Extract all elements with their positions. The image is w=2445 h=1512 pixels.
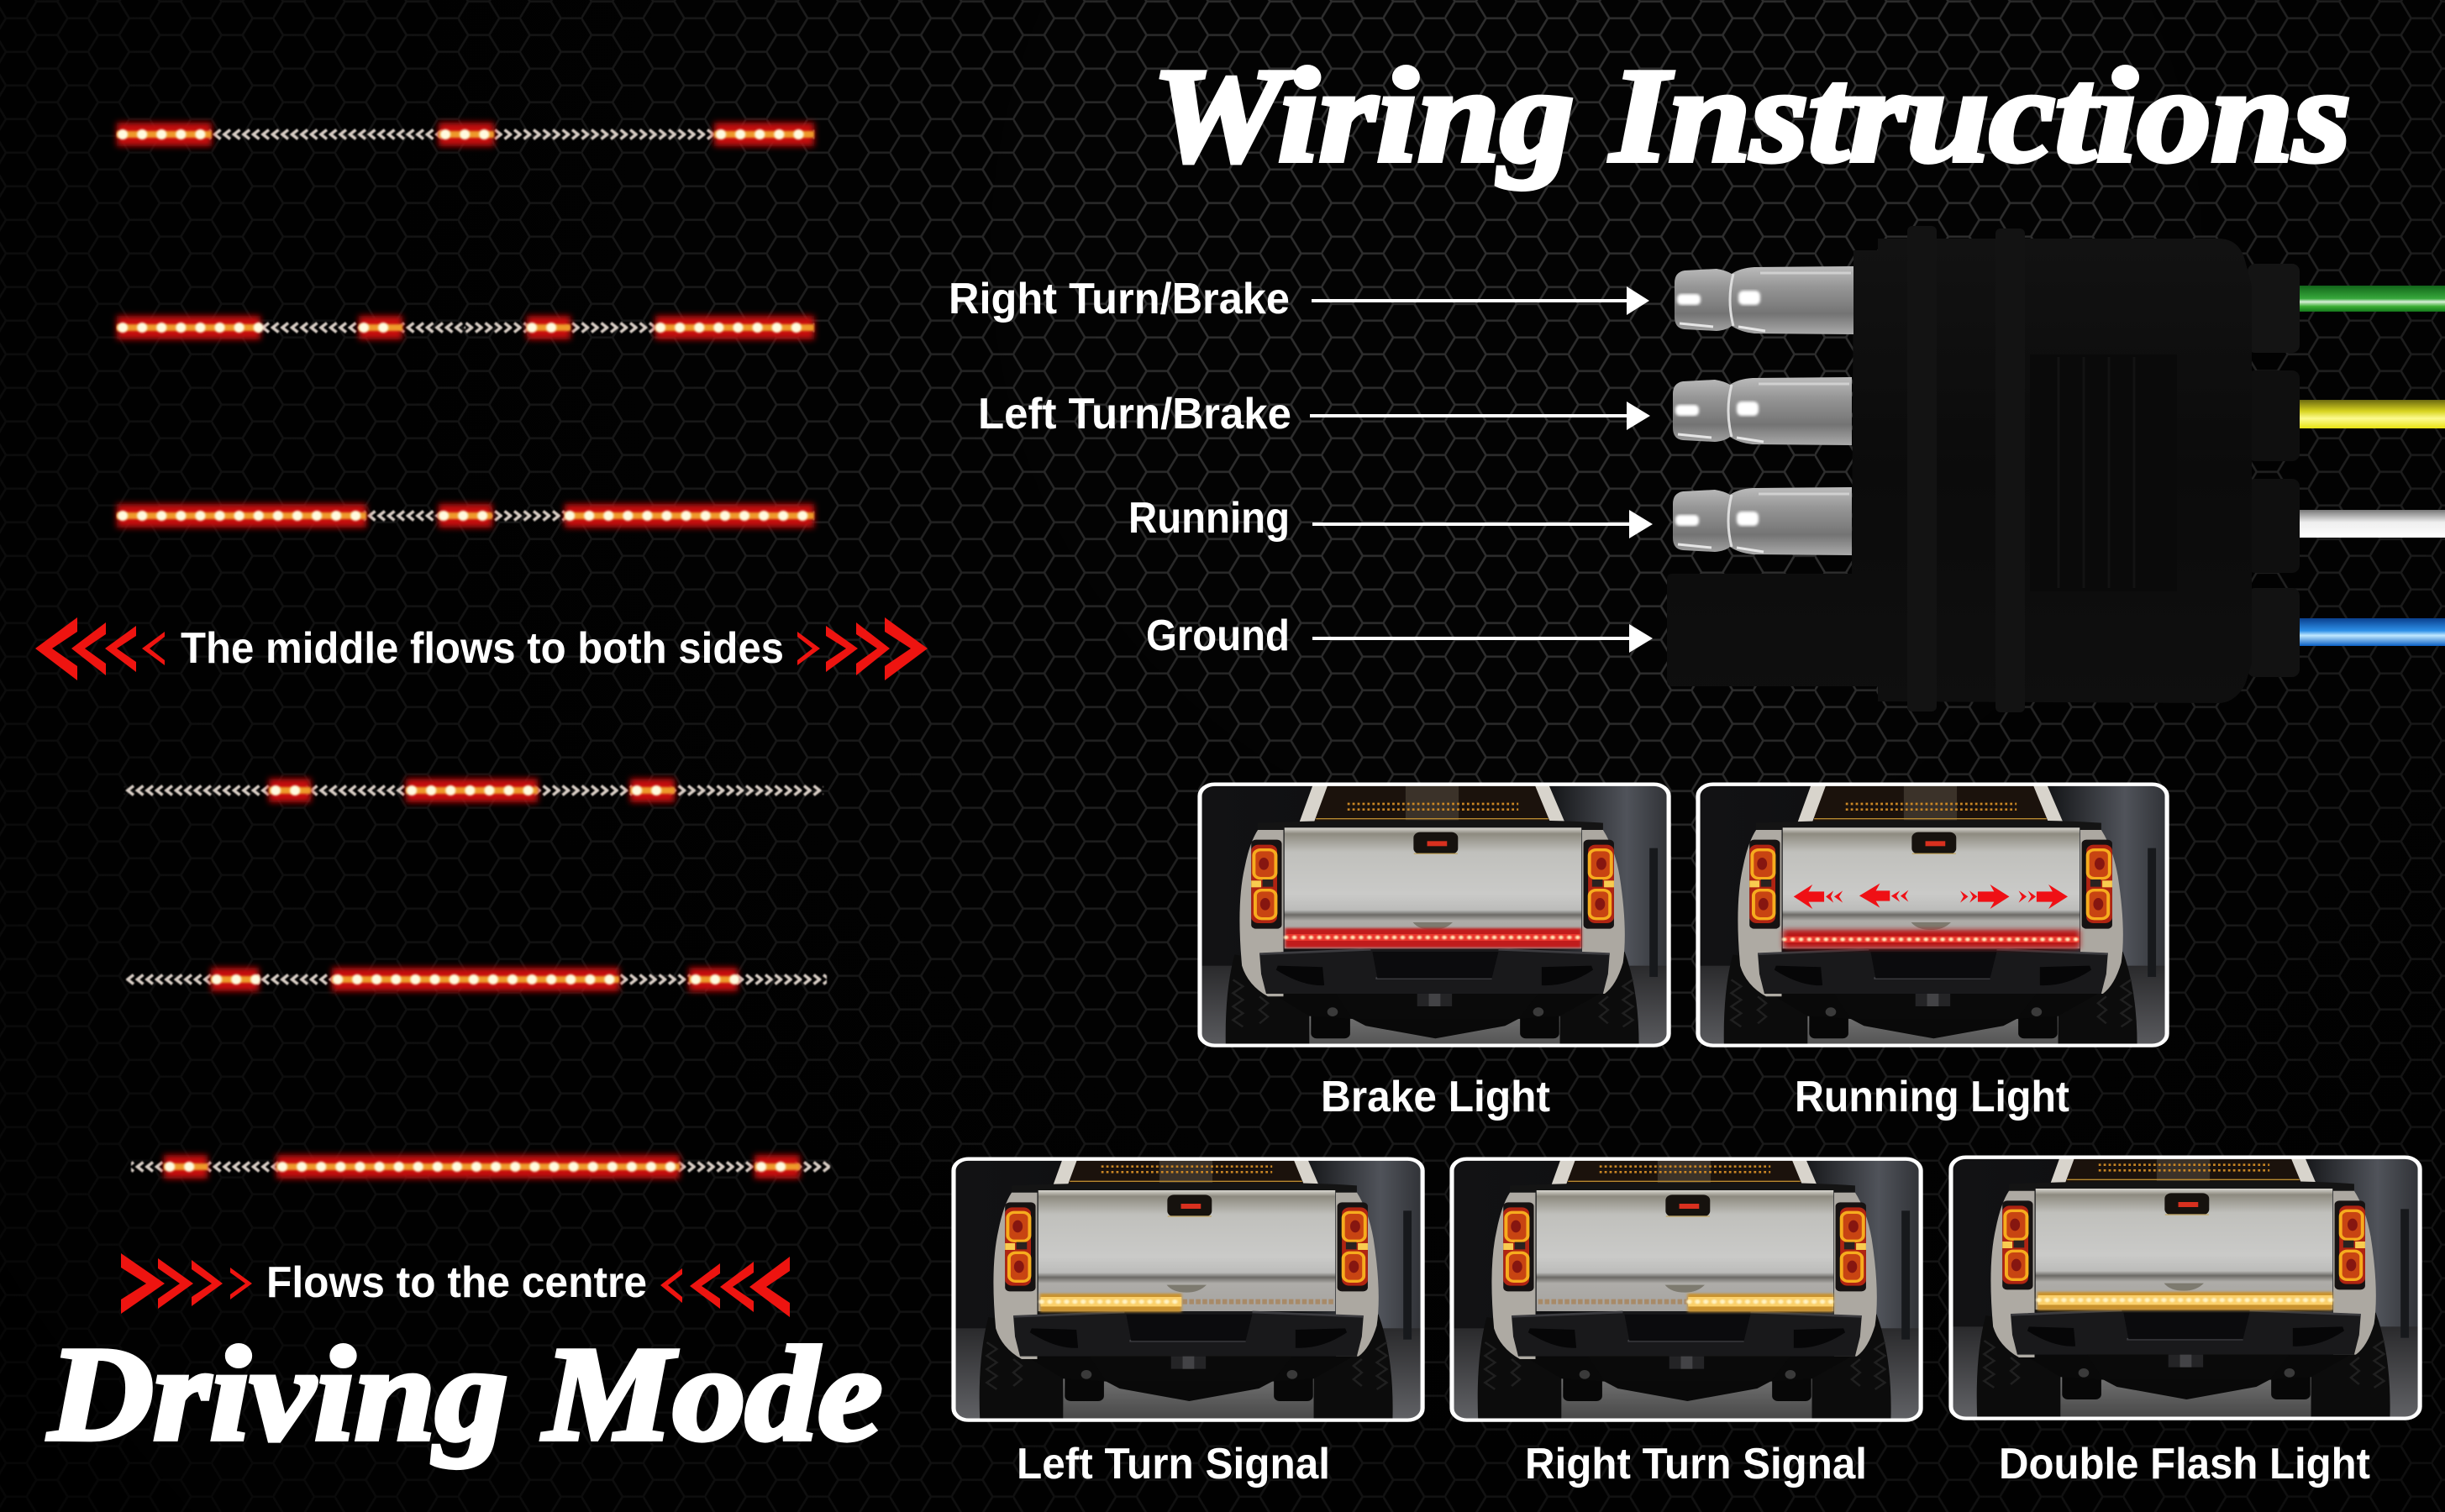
frame <box>1951 1158 2420 1419</box>
caption text: Flows to the centre <box>266 1258 647 1307</box>
truck scene <box>1454 1161 1919 1418</box>
arrow: left turn/brake <box>1310 402 1650 430</box>
truck scene <box>956 1161 1420 1418</box>
chevrons pointing left <box>660 1257 790 1317</box>
label: Ground: Ground <box>1146 612 1290 660</box>
LED strip 1 <box>117 127 814 142</box>
photo: double flash light <box>1948 1133 2426 1425</box>
LED strip 3 <box>117 508 814 523</box>
title: Driving Mode: Driving Mode <box>47 1319 882 1468</box>
arrow: right turn/brake <box>1312 286 1649 315</box>
caption text: The middle flows to both sides <box>181 624 784 673</box>
frame <box>954 1159 1422 1420</box>
label: Right Turn/Brake: Right Turn/Brake <box>949 275 1290 323</box>
LED strip 2 <box>117 320 814 335</box>
terminal: right turn/brake <box>1675 266 1853 334</box>
LED strip group: flows to the centre <box>124 783 830 1174</box>
caption: Running Light: Running Light <box>1795 1073 2069 1121</box>
wire: blue <box>2300 618 2445 646</box>
title: Wiring Instructions: Wiring Instructions <box>1152 40 2351 190</box>
caption: Right Turn Signal: Right Turn Signal <box>1525 1440 1867 1488</box>
LED strip 5 <box>126 972 827 987</box>
chevrons pointing right <box>121 1253 252 1314</box>
caption: The middle flows to both sides, with chevrons <box>35 617 928 680</box>
chevrons pointing right <box>797 617 928 680</box>
frame <box>1698 785 2167 1046</box>
photo: brake light <box>1196 773 1675 1063</box>
truck scene <box>1953 1159 2418 1416</box>
photo: right turn signal <box>1449 1135 1927 1426</box>
frame <box>1200 785 1669 1046</box>
arrow: running <box>1312 510 1653 538</box>
caption: Flows to the centre, with chevrons <box>121 1253 790 1317</box>
wiring arrows <box>1310 286 1653 653</box>
terminal: left turn/brake <box>1673 377 1852 445</box>
LED strip 6 <box>131 1159 830 1174</box>
connector body <box>1667 226 2300 712</box>
truck scene <box>1201 786 1667 1043</box>
LED strip 4 <box>124 783 823 798</box>
caption: Left Turn Signal: Left Turn Signal <box>1017 1440 1330 1488</box>
photo: running light <box>1695 773 2173 1063</box>
truck scene <box>1701 786 2164 1043</box>
wire: yellow <box>2300 400 2445 428</box>
chevrons pointing left <box>35 617 165 680</box>
frame <box>1452 1159 1921 1420</box>
connector plug with wires <box>1667 226 2445 712</box>
caption: Double Flash Light: Double Flash Light <box>1999 1440 2370 1488</box>
wiring labels <box>949 275 1291 660</box>
LED strip group: middle flows to both sides <box>117 127 814 523</box>
caption: Brake Light: Brake Light <box>1321 1073 1550 1121</box>
label: Running: Running <box>1128 494 1290 543</box>
label: Left Turn/Brake: Left Turn/Brake <box>978 390 1291 438</box>
red flow arrows <box>1794 884 2068 909</box>
wire: green <box>2300 286 2445 312</box>
arrow: ground <box>1312 624 1653 653</box>
wire: white <box>2300 510 2445 538</box>
photo: left turn signal <box>950 1135 1428 1426</box>
terminal: running <box>1673 487 1852 555</box>
